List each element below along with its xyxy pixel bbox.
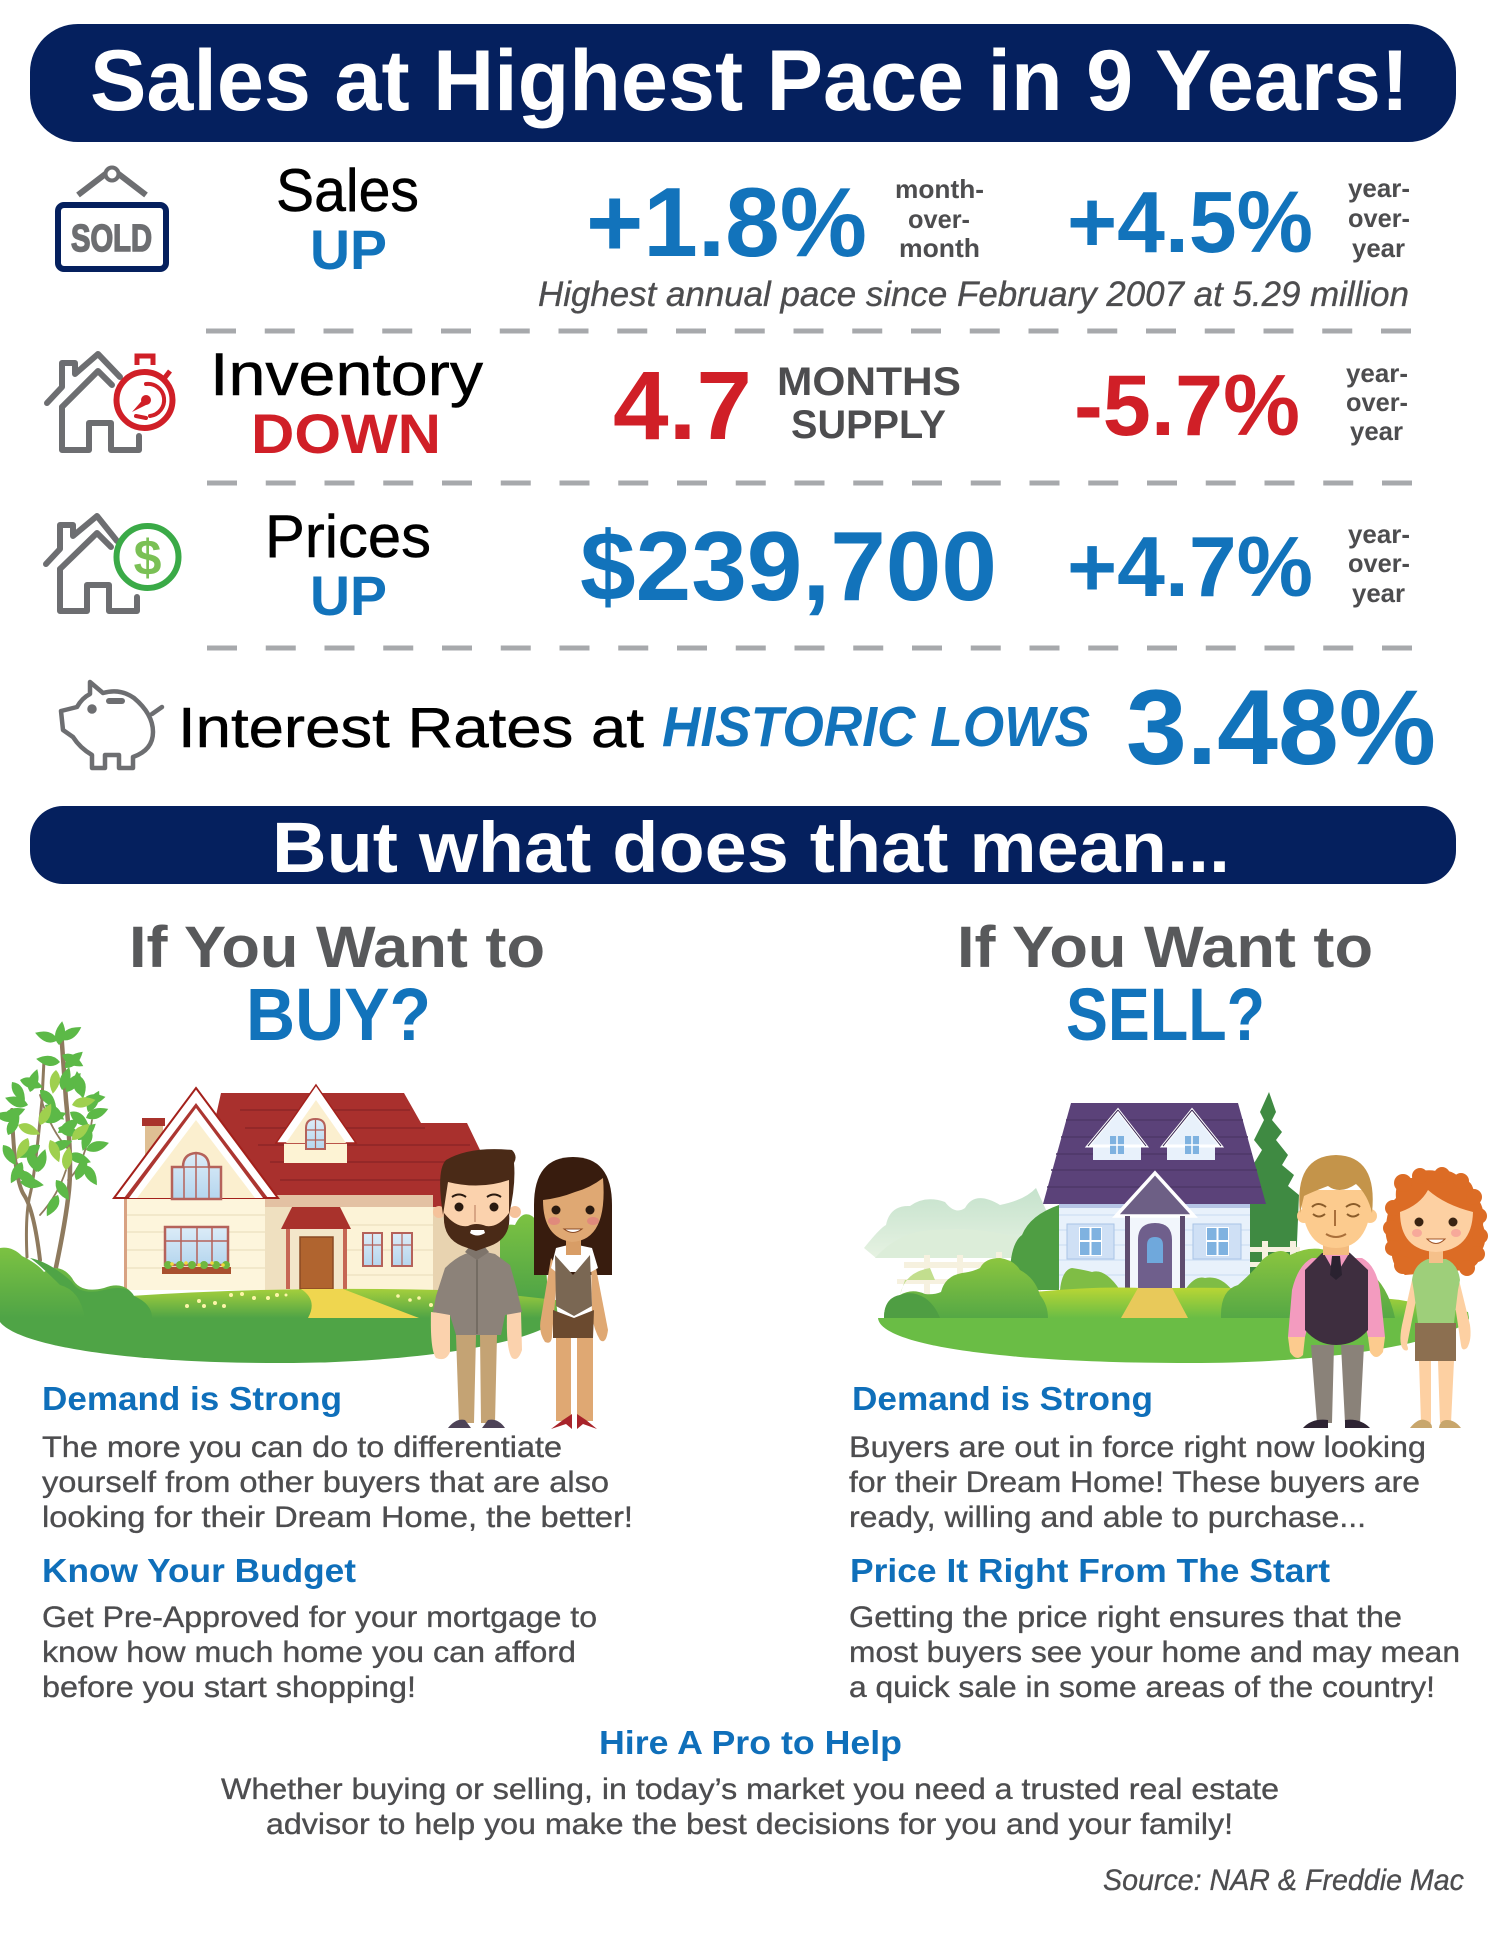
title banner: Sales at Highest Pace in 9 Years! [90, 33, 1409, 129]
text: seller demand: Buyers are out in force right now looking [849, 1431, 1426, 1464]
man with beard [431, 1149, 522, 1428]
heading: sell: SELL? [1066, 973, 1265, 1056]
illustration: sellers scene [864, 1092, 1488, 1428]
bushes right [1221, 1249, 1395, 1318]
inventory down label: DOWN [251, 402, 441, 465]
text: price it right: Getting the price right ensures that the [849, 1601, 1402, 1634]
stat: inventory year over year: over- [1346, 387, 1408, 417]
stat: median price: $239,700 [580, 511, 997, 621]
heading: sell [957, 915, 1373, 1056]
icon: sold sign: SOLD [71, 218, 152, 260]
inventory down label: Inventory [210, 341, 483, 408]
icon: sold sign [58, 168, 166, 269]
bushes left [884, 1258, 1048, 1318]
house [1043, 1103, 1266, 1290]
pine tree [1245, 1092, 1299, 1290]
source note: Source: NAR & Freddie Mac [1103, 1864, 1464, 1897]
text: know your budget: Know Your Budget [42, 1552, 356, 1589]
path [1121, 1288, 1188, 1318]
shrub behind people [490, 1214, 548, 1300]
woman with red curly hair [1383, 1167, 1488, 1428]
text: know your budget: before you start shopping! [42, 1671, 416, 1704]
text: buyer demand: The more you can do to differentiate [42, 1431, 562, 1464]
prices up label: UP [310, 564, 387, 627]
heading: buy: If You Want to [129, 915, 545, 980]
stat: inventory year over year: -5.7% [1074, 358, 1300, 454]
stat: sales month over month: month- [895, 174, 984, 204]
sales up label [276, 157, 419, 281]
man in vest [1288, 1155, 1385, 1428]
stat: sales year over year: +4.5% [1067, 174, 1313, 271]
text: buyer demand: Demand is Strong [42, 1380, 342, 1417]
text: buyer demand [42, 1380, 633, 1534]
lawn [130, 1289, 558, 1318]
stat: interest rate: 3.48% [1126, 667, 1436, 787]
text: hire a pro: Hire A Pro to Help [599, 1724, 902, 1761]
icon: house with dollar coin [46, 516, 178, 611]
icon: piggy bank [61, 682, 162, 768]
text: know your budget: Get Pre-Approved for your mortgage to [42, 1601, 597, 1634]
stat: months supply: SUPPLY [791, 403, 946, 447]
interest rates statement [178, 695, 1090, 760]
text: hire a pro [221, 1724, 1279, 1841]
stat: sales month over month: over- [908, 204, 970, 234]
heading: buy: BUY? [246, 973, 431, 1056]
interest rates statement: HISTORIC LOWS [662, 695, 1090, 759]
fence [897, 1241, 1300, 1302]
text: price it right: Price It Right From The Start [850, 1552, 1330, 1589]
text: buyer demand: yourself from other buyers that are also [42, 1466, 609, 1499]
text: hire a pro: advisor to help you make the best decisions for you and your family! [266, 1808, 1233, 1841]
text: price it right: a quick sale in some areas of the country! [849, 1671, 1435, 1704]
section banner: But what does that mean... [272, 809, 1230, 888]
text: seller demand [849, 1380, 1426, 1534]
heading: buy [129, 915, 545, 1056]
text: seller demand: for their Dream Home! These buyers are [849, 1466, 1420, 1499]
text: hire a pro: Whether buying or selling, in today’s market you need a trusted real estate [221, 1773, 1279, 1806]
shrubs at wall [1060, 1268, 1120, 1290]
right windows [363, 1233, 382, 1266]
stat: sales year over year: over- [1348, 203, 1410, 233]
heading: sell: If You Want to [957, 915, 1373, 980]
stat: months supply [613, 351, 961, 460]
stat: sales year over year: year- [1348, 173, 1410, 203]
stat: prices year over year: year [1352, 578, 1405, 608]
lawn [1034, 1288, 1469, 1318]
porch [1116, 1173, 1194, 1216]
icon: house with dollar coin: $ [134, 530, 162, 586]
stat: prices year over year: over- [1348, 548, 1410, 578]
mist hills [864, 1188, 1046, 1258]
porch [288, 1229, 346, 1289]
stat: months supply: 4.7 [613, 351, 752, 460]
annual pace note: Highest annual pace since February 2007 at 5.29 million [538, 275, 1409, 314]
ground [0, 1318, 558, 1363]
stat: sales month over month: +1.8% [586, 167, 867, 277]
lower window [165, 1227, 228, 1265]
text: price it right [849, 1552, 1460, 1704]
flowers [185, 1292, 433, 1308]
text: know your budget [42, 1552, 597, 1704]
stat: prices year over year: year- [1348, 519, 1410, 549]
stat: prices year over year: +4.7% [1067, 520, 1313, 615]
stat: inventory year over year: year- [1346, 358, 1408, 388]
path [301, 1289, 419, 1318]
section banner [30, 806, 1456, 888]
sales up label: Sales [276, 157, 419, 224]
ground [878, 1318, 1469, 1363]
tree [0, 1020, 110, 1272]
dormer [284, 1130, 347, 1163]
woman with dark hair [534, 1157, 612, 1429]
prices up label [265, 503, 431, 627]
windows [1067, 1224, 1114, 1259]
text: price it right: most buyers see your home and may mean [849, 1636, 1460, 1669]
sales up label: UP [310, 218, 387, 281]
stat: sales month over month: month [899, 233, 980, 263]
stat: inventory year over year [1074, 358, 1408, 454]
inventory down label [210, 341, 483, 465]
illustration: buyers scene [0, 1020, 612, 1429]
text: know your budget: know how much home you can afford [42, 1636, 576, 1669]
stat: inventory year over year: year [1350, 416, 1403, 446]
text: seller demand: Demand is Strong [852, 1380, 1153, 1417]
prices up label: Prices [265, 503, 431, 570]
stat: sales year over year: year [1352, 233, 1405, 263]
stat: months supply: MONTHS [777, 360, 961, 404]
bush behind house [1010, 1205, 1059, 1290]
text: buyer demand: looking for their Dream Home, the better! [42, 1501, 633, 1534]
text: seller demand: ready, willing and able to purchase... [849, 1501, 1366, 1534]
icon: house with stopwatch [47, 354, 172, 450]
house [114, 1085, 500, 1290]
bush [0, 1248, 152, 1318]
interest rates statement: Interest Rates at [178, 696, 644, 760]
dormers [1093, 1140, 1141, 1160]
